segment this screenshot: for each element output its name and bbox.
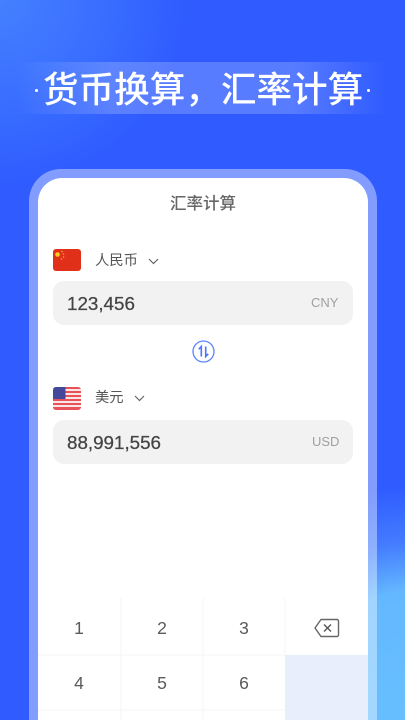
currency code: CNY: CNY xyxy=(311,295,338,310)
screen title: 汇率计算 xyxy=(170,190,236,214)
icon: backspace xyxy=(314,618,340,638)
icon: chevron xyxy=(148,258,158,264)
panel: converter screen xyxy=(38,178,368,720)
key 6: 6 xyxy=(239,673,249,693)
icon: China flag xyxy=(53,249,81,271)
key 3: 3 xyxy=(239,618,249,638)
icon: chevron xyxy=(134,396,144,402)
input field: CNY xyxy=(53,281,353,325)
icon: USA flag xyxy=(53,387,81,410)
amount: CNY: 123,456 xyxy=(67,293,135,314)
phone frame xyxy=(29,169,377,720)
currency code: USD: USD xyxy=(312,434,339,449)
keypad grid lines xyxy=(38,598,286,720)
currency label: RMB: 人民币 xyxy=(95,249,138,270)
title: 货币换算，汇率计算 xyxy=(43,62,363,113)
key 4: 4 xyxy=(74,673,84,693)
currency label: USD: 美元 xyxy=(95,386,124,407)
title band xyxy=(0,62,405,114)
icon: swap xyxy=(192,340,215,363)
input field: USD xyxy=(53,420,353,464)
key 1: 1 xyxy=(74,618,84,638)
highlighted key xyxy=(285,655,368,720)
amount: USD: 88,991,556 xyxy=(67,432,161,453)
key 5: 5 xyxy=(157,673,167,693)
key 2: 2 xyxy=(157,618,167,638)
